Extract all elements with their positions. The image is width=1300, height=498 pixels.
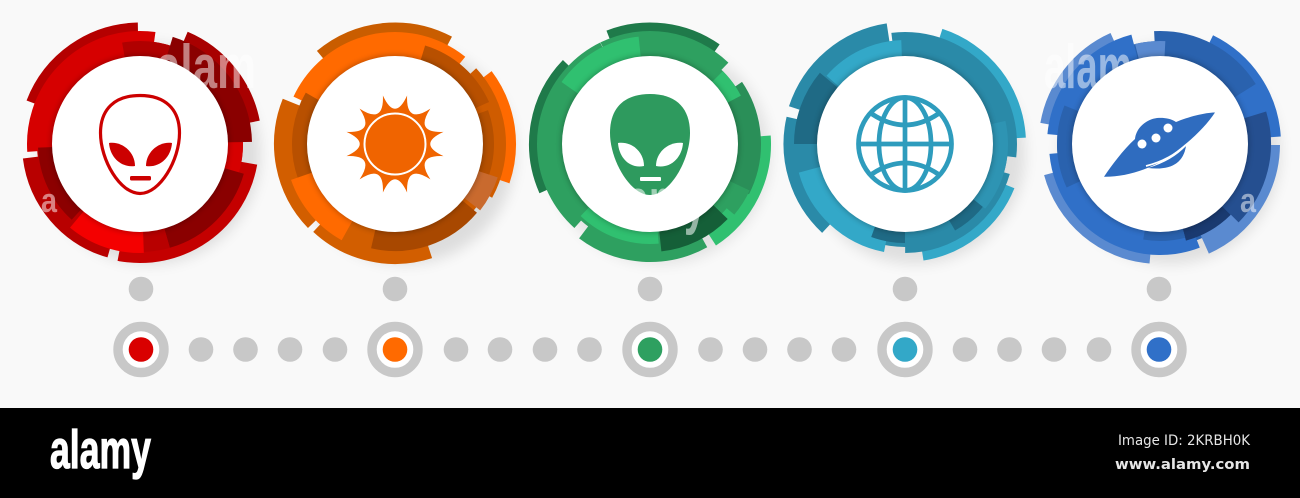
timeline marker: blue — [1136, 326, 1182, 372]
white disc — [817, 56, 993, 232]
badge: teal globe — [759, 0, 1051, 290]
timeline marker: teal — [882, 326, 928, 372]
image id: Image ID: 2KRBH0K — [1118, 433, 1251, 449]
watermark: alamy fragments: alam — [156, 33, 256, 102]
watermark: alamy fragments: alam — [1044, 33, 1132, 102]
icon: alien outline — [100, 96, 180, 194]
watermark: alamy fragment: lamy — [616, 167, 706, 236]
ring: teal segments — [759, 0, 1051, 290]
ring: red segments — [0, 0, 291, 295]
watermark: alamy fragments — [1044, 33, 1257, 220]
icon: globe — [858, 98, 952, 190]
footer band — [0, 408, 1300, 498]
badge: blue ufo — [1022, 6, 1298, 282]
badge: green alien filled — [501, 0, 799, 293]
ring: blue segments — [1022, 6, 1298, 282]
icon: ufo — [1104, 112, 1215, 177]
timeline marker: orange — [372, 326, 418, 372]
icon: sun — [346, 96, 444, 192]
ring: orange segments — [233, 0, 557, 306]
watermark: alamy fragments: a — [1240, 182, 1257, 220]
badge: orange sun — [233, 0, 557, 306]
website: www.alamy.com — [1115, 457, 1250, 473]
white disc — [1072, 56, 1248, 232]
timeline marker: red — [118, 326, 164, 372]
logo: alamy: alamy — [50, 420, 151, 480]
white disc — [52, 56, 228, 232]
connector dots: upper row — [129, 277, 1171, 301]
icon: alien filled — [610, 94, 690, 195]
timeline marker: green — [627, 326, 673, 372]
timeline: small grey dots — [189, 337, 1111, 362]
white disc — [562, 56, 738, 232]
badge: red alien outline — [0, 0, 291, 295]
watermark: alamy fragments — [41, 33, 256, 220]
ring: green segments — [501, 0, 799, 293]
watermark: alamy fragments: a — [41, 182, 58, 220]
white disc — [307, 56, 483, 232]
